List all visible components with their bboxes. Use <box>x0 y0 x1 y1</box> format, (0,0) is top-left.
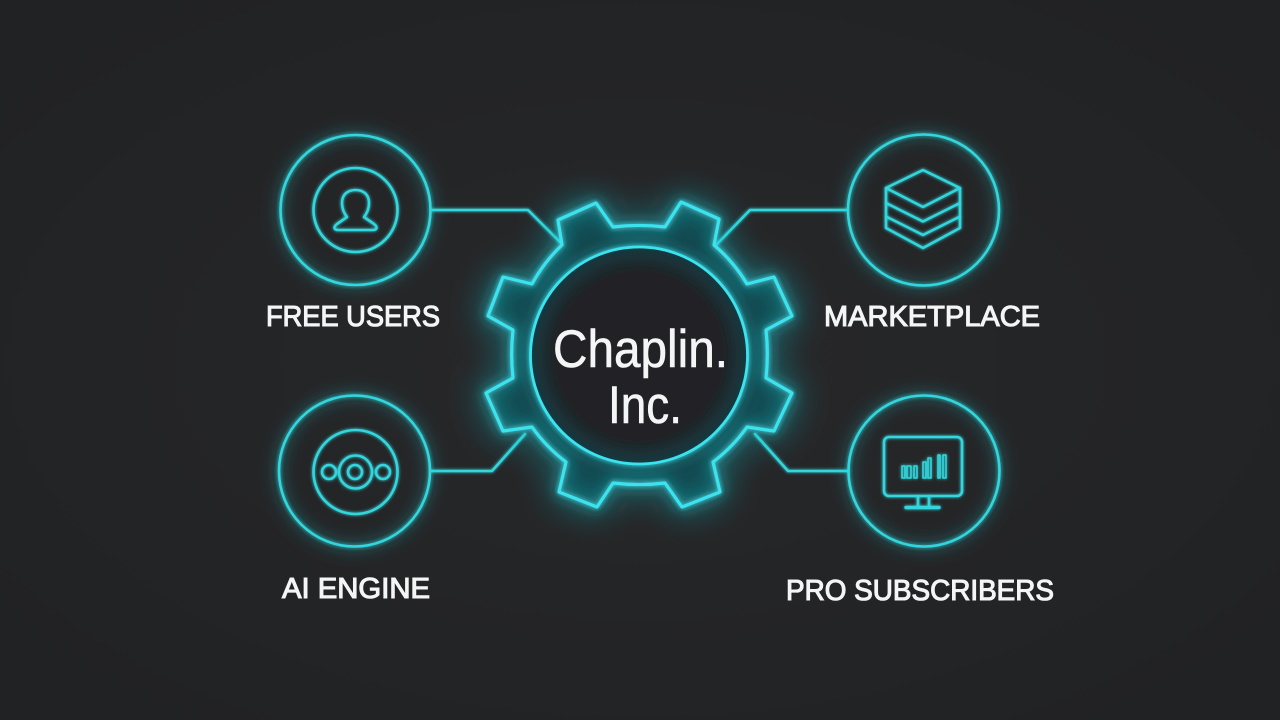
pro subscribers ring <box>848 396 1000 546</box>
central gear <box>486 202 792 507</box>
gear title: Chaplin. <box>553 320 728 379</box>
free users ring <box>280 135 430 285</box>
node: pro subscribers <box>786 396 1054 607</box>
marketplace label: MARKETPLACE <box>824 301 1040 333</box>
gear inner ring <box>530 247 748 464</box>
marketplace ring <box>848 134 999 286</box>
pro subscribers label: PRO SUBSCRIBERS <box>786 575 1054 607</box>
icon: ai core <box>314 430 398 514</box>
icon: monitor with bars <box>884 437 962 508</box>
node: free users <box>266 135 440 333</box>
ai engine label: AI ENGINE <box>282 573 430 605</box>
free users label: FREE USERS <box>266 301 440 333</box>
icon: user <box>314 168 398 252</box>
ai engine ring <box>279 396 430 546</box>
gear outline <box>486 202 792 507</box>
icon: layered cube <box>886 170 960 248</box>
node: marketplace <box>824 134 1040 333</box>
gear title: Inc. <box>608 376 682 435</box>
node: ai engine <box>279 396 430 605</box>
connector lines <box>431 210 848 471</box>
gear title <box>553 320 728 435</box>
